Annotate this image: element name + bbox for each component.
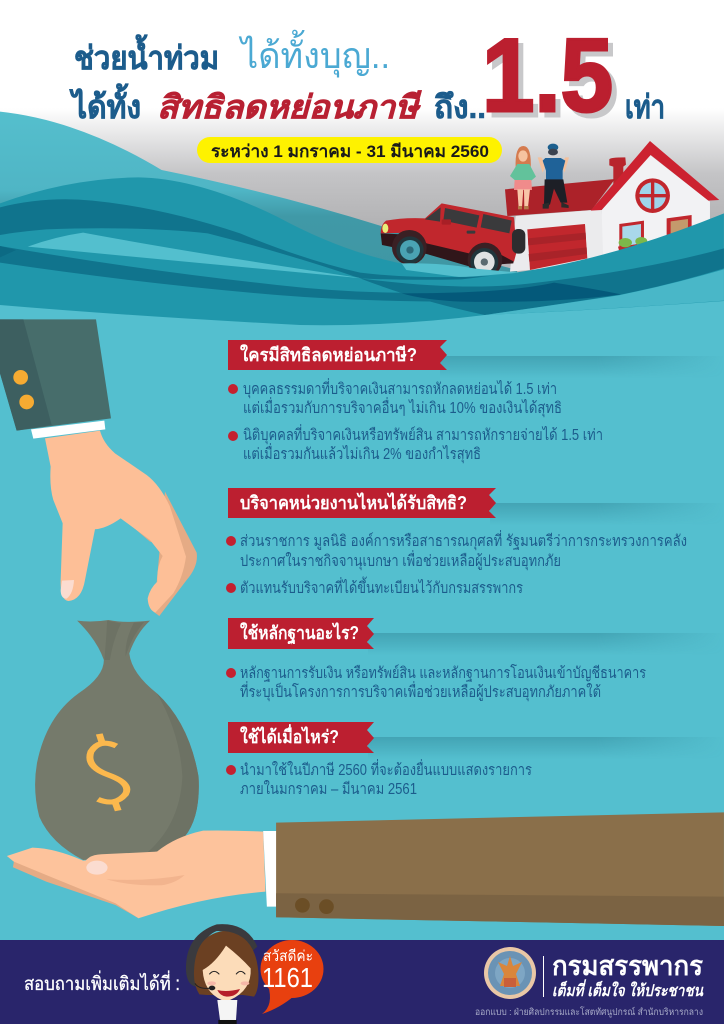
bubble tail (262, 985, 294, 1014)
wave: upper dark ribbon (0, 199, 489, 280)
thumb (83, 852, 185, 879)
date pill (197, 137, 502, 163)
door (667, 215, 692, 247)
door handle (467, 231, 475, 234)
body text: แต่เมื่อรวมกันแล้วไม่เกิน 2% ของกำไรสุทธิ (243, 443, 481, 464)
heading: บริจาคหน่วยงานไหนได้รับสิทธิ? (240, 492, 467, 513)
big number shadow: 1.5 (487, 23, 618, 139)
section 1 (228, 340, 724, 464)
body text: ที่ระบุเป็นโครงการการบริจาคเพื่อช่วยเหลือผู้ประสบอุทกภัยภาคใต้ (240, 681, 601, 702)
windows (443, 208, 512, 233)
round window (635, 178, 670, 213)
mirror (442, 219, 451, 225)
face (518, 150, 528, 162)
face (203, 946, 251, 1000)
section 4 (226, 722, 688, 794)
gable front (602, 155, 710, 263)
credit: ออกแบบ : ฝ่ายศิลปกรรมและโสตทัศนูปกรณ์ สำนักบริหารกลาง (475, 1006, 703, 1018)
streak (368, 737, 688, 754)
bag neck folds (104, 621, 144, 660)
upper hand with sleeve (0, 319, 197, 616)
bubble (260, 940, 324, 998)
headset (186, 924, 257, 987)
phone number: 1161 (262, 962, 313, 993)
greeting: สวัสดีค่ะ (263, 948, 313, 965)
body text: แต่เมื่อรวมกับการบริจาคอื่นๆ ไม่เกิน 10% ของเงินได้สุทธิ (243, 397, 562, 418)
heading: ใช้ได้เมื่อไหร่? (240, 724, 339, 747)
chimney (609, 157, 626, 187)
wave: right dark sweep (360, 248, 724, 315)
lower hand with sleeve (7, 812, 724, 926)
hair (194, 931, 258, 997)
body (217, 1000, 237, 1020)
streak (368, 633, 688, 650)
wave: right light lens (485, 269, 724, 315)
revenue department logo (475, 947, 704, 1018)
hair (516, 146, 531, 174)
title red phrase: สิทธิลดหย่อนภาษี (157, 89, 422, 125)
background: page water colour (0, 296, 724, 940)
microphone (195, 983, 209, 988)
wave: light lens (28, 233, 362, 278)
title line 1 light: ได้ทั้งบุญ.. (238, 29, 390, 78)
bullet (226, 583, 236, 593)
window (619, 221, 644, 250)
hand (45, 431, 186, 613)
body (381, 203, 517, 262)
wave: darkest overlap (402, 283, 621, 302)
wave: light swell under car (402, 263, 519, 277)
streak (440, 356, 688, 372)
legs (517, 189, 530, 207)
speech bubble 1161 (260, 940, 324, 1014)
department name: กรมสรรพากร (552, 951, 703, 981)
garage door (527, 224, 587, 270)
headlight (382, 224, 388, 233)
seal (484, 947, 536, 999)
arms (538, 157, 569, 173)
illustration: woman on roof (510, 146, 536, 209)
gable roof (591, 141, 719, 211)
body text: หลักฐานการรับเงิน หรือทรัพย์สิน และหลักฐานการโอนเงินเข้าบัญชีธนาคาร (240, 664, 646, 682)
body text: นำมาใช้ในปีภาษี 2560 ที่จะต้องยื่นแบบแสดงรายการ (240, 759, 532, 779)
bullet (228, 431, 238, 441)
call centre agent (186, 924, 258, 1024)
banner (228, 722, 374, 753)
cuff (31, 421, 105, 439)
title line 2: ได้ทั้ง (69, 83, 141, 125)
sleeve (276, 812, 724, 926)
cuff (263, 831, 277, 907)
streak (490, 503, 688, 518)
eyes (209, 971, 245, 974)
trousers (544, 179, 567, 205)
banner (228, 488, 496, 518)
spare wheel (512, 229, 525, 254)
wave: main teal (0, 177, 724, 325)
back wave (0, 112, 517, 287)
bag body (35, 620, 199, 860)
sleeve buttons (295, 898, 310, 913)
thumbnail (86, 861, 108, 875)
bullet (226, 668, 236, 678)
body text: บุคคลธรรมดาที่บริจาคเงินสามารถหักลดหย่อนได้ 1.5 เท่า (243, 378, 557, 399)
section 2 (226, 488, 688, 593)
hand shade (7, 856, 157, 918)
sleeve (0, 319, 111, 431)
big number: 1.5 (482, 18, 613, 134)
cap (548, 144, 558, 151)
illustration: house (505, 141, 719, 272)
underbody (381, 233, 517, 267)
illustration: man on roof (538, 144, 569, 209)
top (510, 164, 536, 181)
heading: ใช้หลักฐานอะไร? (240, 622, 359, 645)
thumb fold (106, 875, 185, 885)
cheeks (207, 981, 216, 985)
banner (228, 340, 447, 370)
garage wall (510, 209, 605, 272)
title block (69, 18, 665, 139)
hand shade (121, 492, 197, 616)
slogan: เต็มที่ เต็มใจ ให้ประชาชน (552, 979, 704, 1000)
illustration: red car (381, 203, 525, 277)
footer enquiry text: สอบถามเพิ่มเติมได้ที่ : (24, 970, 180, 995)
section 3 (226, 618, 724, 702)
money bag (35, 620, 199, 860)
dollar sign (90, 734, 127, 811)
body text: ประกาศในราชกิจจานุเบกษา เพื่อช่วยเหลือผู้ประสบอุทกภัย (240, 550, 561, 571)
body text: ภายในมกราคม – มีนาคม 2561 (240, 780, 417, 798)
cuff buttons (13, 370, 28, 385)
skirt (514, 180, 532, 190)
windscreen (425, 207, 441, 222)
heading: ใครมีสิทธิลดหย่อนภาษี? (240, 344, 417, 365)
title line 1: ช่วยน้ำท่วม (74, 34, 219, 76)
rear wheel (468, 243, 502, 277)
date pill: ระหว่าง 1 มกราคม - 31 มีนาคม 2560 (211, 141, 489, 161)
shirt (543, 158, 565, 180)
divider (543, 956, 544, 997)
thumbnail (61, 580, 74, 599)
title to: ถึง.. (434, 89, 486, 125)
body text: ตัวแทนรับบริจาคที่ได้ขึ้นทะเบียนไว้กับกรมสรรพากร (240, 576, 523, 597)
bullet (228, 384, 238, 394)
roof (505, 179, 615, 216)
title times: เท่า (625, 89, 665, 125)
footer bar (0, 940, 724, 1024)
banner (228, 618, 374, 649)
bullet (226, 536, 236, 546)
bullet (226, 765, 236, 775)
flower box (618, 243, 647, 254)
mouth (217, 989, 240, 997)
background: sky gradient (0, 0, 724, 300)
front waves (0, 177, 724, 325)
bag shade (143, 693, 199, 856)
body text: นิติบุคคลที่บริจาคเงินหรือทรัพย์สิน สามารถหักรายจ่ายได้ 1.5 เท่า (243, 424, 603, 445)
front wheel (392, 230, 427, 265)
hand (7, 830, 265, 918)
wave: lower dark ribbon (0, 246, 462, 302)
